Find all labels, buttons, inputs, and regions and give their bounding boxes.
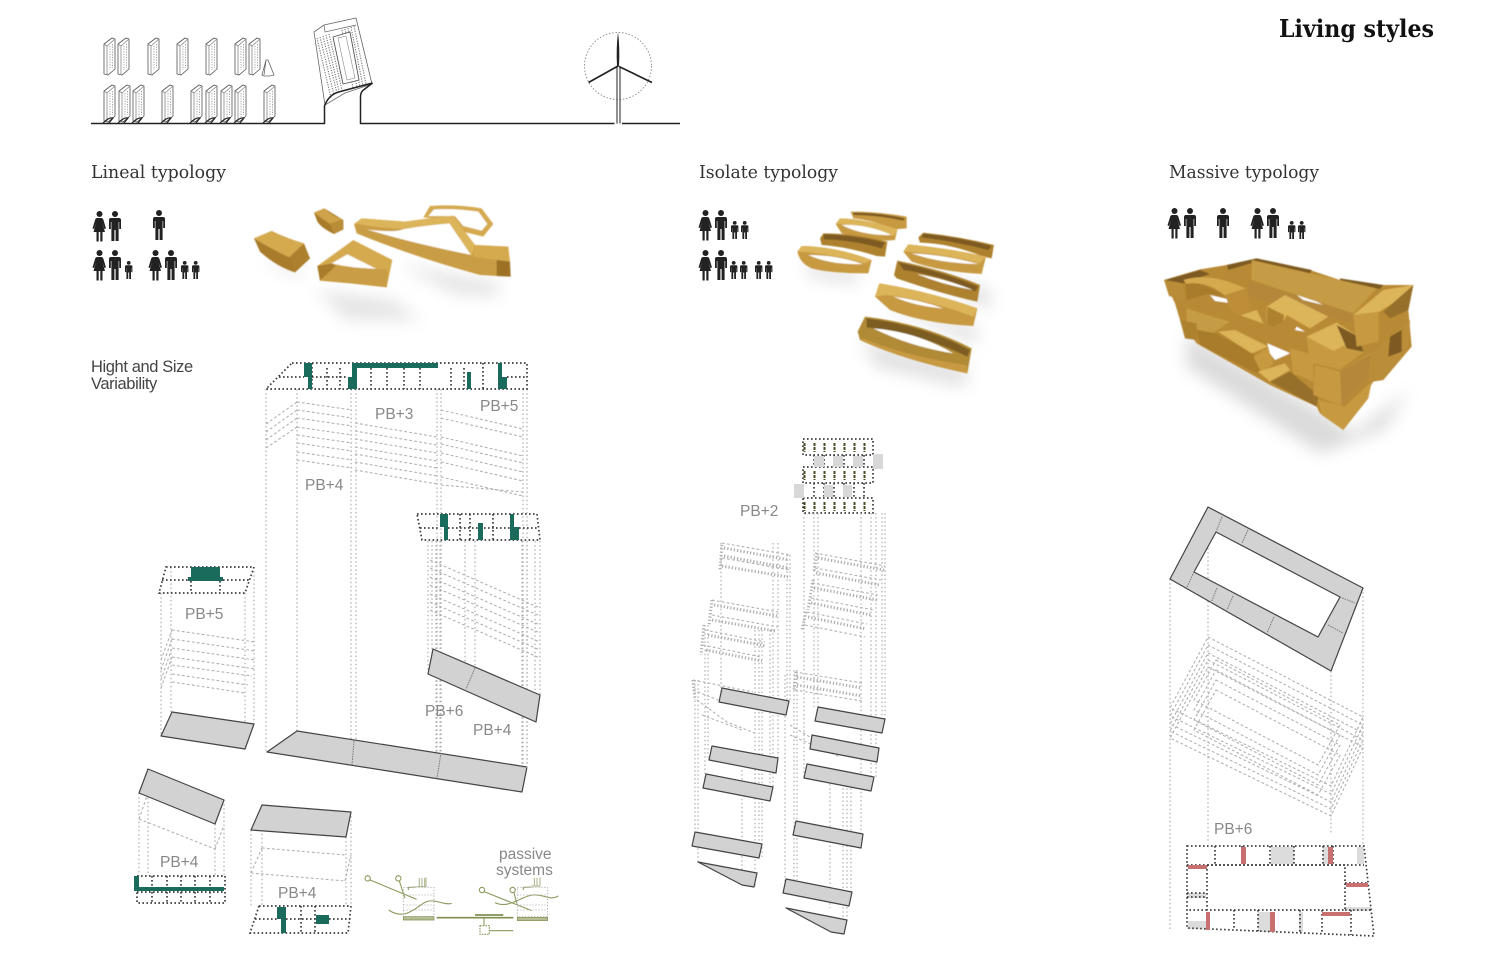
title: Living styles bbox=[1279, 14, 1434, 43]
wind turbine bbox=[584, 32, 652, 124]
ground line bbox=[91, 83, 680, 124]
diagram: isolate left tower bbox=[692, 543, 790, 887]
tilted tower bbox=[314, 18, 372, 105]
diagram: lineal bottom block bbox=[250, 805, 351, 933]
label: PB+6 massive: PB+6 bbox=[1214, 821, 1252, 838]
text: height and size variability bbox=[91, 358, 193, 393]
diagram: lineal bottom-left block: PB+4 bbox=[160, 854, 199, 871]
diagram: massive ground floor plan bbox=[1187, 846, 1374, 936]
photo: massive cardboard model bbox=[1164, 258, 1413, 453]
floor lines bbox=[266, 402, 523, 496]
icons: massive household types bbox=[1168, 208, 1305, 239]
label: passive systems bbox=[496, 846, 553, 879]
green core walls bbox=[304, 363, 507, 389]
diagram: passive systems section bbox=[365, 876, 558, 934]
heading: lineal typology: Lineal typology bbox=[91, 162, 227, 183]
diagram: isolate right tower bbox=[783, 513, 885, 934]
photo: isolate cardboard model bbox=[797, 212, 994, 387]
diagram: isolate floor plans bbox=[794, 439, 883, 513]
text: height and size variability: Hight and Size bbox=[91, 358, 193, 376]
text: height and size variability: Variability bbox=[91, 375, 158, 393]
label: PB+2: PB+2 bbox=[740, 503, 778, 520]
diagram: massive upper floor plan bbox=[1170, 507, 1363, 930]
diagram: lineal small block bbox=[159, 567, 255, 749]
diagram: lineal small block: PB+5 bbox=[185, 606, 223, 623]
icons: lineal household types bbox=[92, 210, 199, 280]
label: PB+6: PB+6 bbox=[425, 703, 463, 720]
small apartment blocks bbox=[104, 38, 275, 122]
slab bbox=[267, 731, 527, 792]
diagram: lineal right block bbox=[417, 514, 540, 768]
icons: isolate household types bbox=[698, 210, 772, 280]
label: passive systems: passive bbox=[499, 846, 552, 863]
label: PB+4 right: PB+4 bbox=[473, 722, 512, 739]
diagram: lineal bottom-left block bbox=[134, 769, 225, 903]
diagram: lineal main block bbox=[266, 363, 527, 792]
roof plan bbox=[266, 363, 527, 389]
skyline strip bbox=[91, 18, 680, 124]
heading: massive typology: Massive typology bbox=[1169, 162, 1320, 183]
verticals bbox=[266, 389, 527, 768]
label: PB+5: PB+5 bbox=[480, 398, 518, 415]
heading: isolate typology: Isolate typology bbox=[699, 162, 839, 183]
label: PB+4: PB+4 bbox=[305, 477, 344, 494]
diagram: lineal bottom block: PB+4 bbox=[278, 885, 317, 902]
label: passive systems: systems bbox=[496, 862, 553, 879]
photo: lineal cardboard model bbox=[254, 205, 511, 320]
label: PB+3 bbox=[375, 406, 413, 423]
